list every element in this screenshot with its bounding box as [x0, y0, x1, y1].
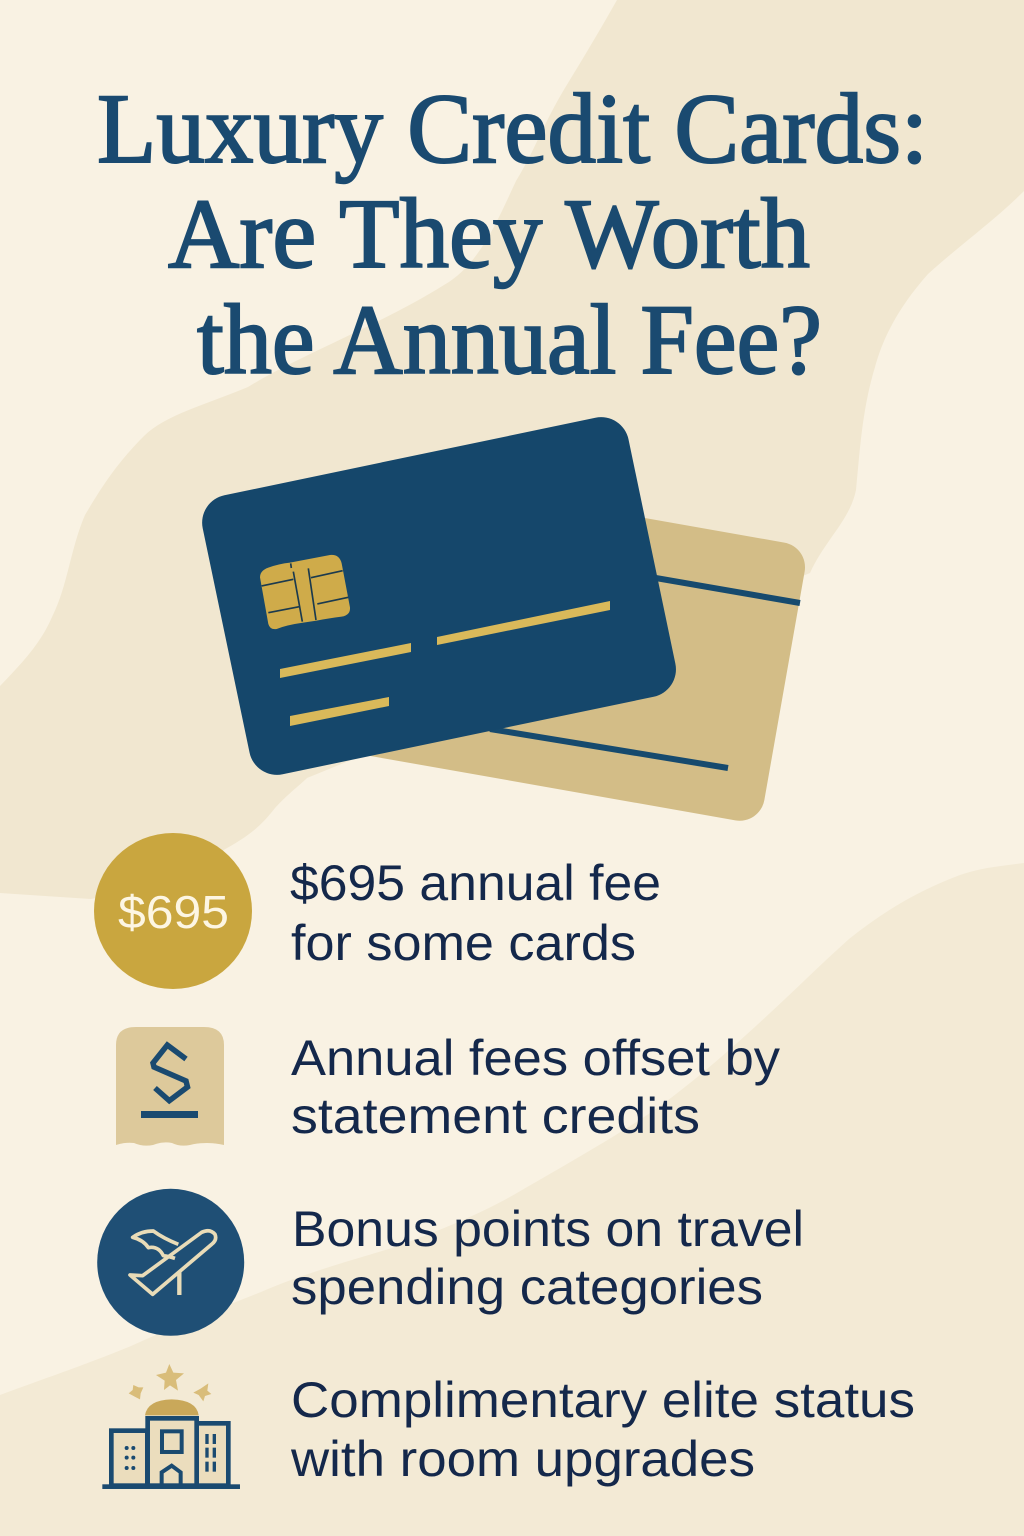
- text: annual fee: [290, 855, 661, 971]
- back gold card: [337, 472, 809, 825]
- list item: travel points: [97, 1189, 804, 1336]
- icon: $695 coin: [94, 833, 252, 989]
- background wave: lower band: [0, 863, 1024, 1536]
- list item: statement credits: [116, 1027, 780, 1146]
- text: elite status: with room upgrades: [290, 1431, 755, 1487]
- text: statement credits: statement credits: [291, 1088, 700, 1144]
- list item: annual fee: [94, 833, 661, 989]
- title: [97, 73, 928, 395]
- text: travel points: [291, 1201, 804, 1315]
- list item: elite status: [102, 1364, 915, 1489]
- icon: hotel with stars: [102, 1364, 240, 1489]
- text: annual fee: for some cards: [291, 915, 636, 971]
- icon: airplane: [97, 1189, 244, 1336]
- background wave: upper band: [0, 0, 1024, 899]
- icon: $695 coin: $695: [118, 886, 229, 938]
- title: Luxury Credit Cards:: [97, 73, 928, 184]
- text: annual fee: $695 annual fee: [290, 855, 661, 911]
- front navy card: [197, 412, 681, 780]
- title: Are They Worth: [168, 178, 810, 289]
- text: elite status: [290, 1372, 915, 1487]
- title: the Annual Fee?: [197, 284, 822, 395]
- text: elite status: Complimentary elite status: [291, 1372, 915, 1428]
- credit cards illustration: [197, 412, 809, 825]
- icon: receipt: [116, 1027, 224, 1146]
- text: statement credits: [291, 1030, 780, 1144]
- text: statement credits: Annual fees offset by: [291, 1030, 780, 1086]
- text: travel points: Bonus points on travel: [292, 1201, 804, 1257]
- text: travel points: spending categories: [291, 1259, 763, 1315]
- card chip: [260, 555, 350, 629]
